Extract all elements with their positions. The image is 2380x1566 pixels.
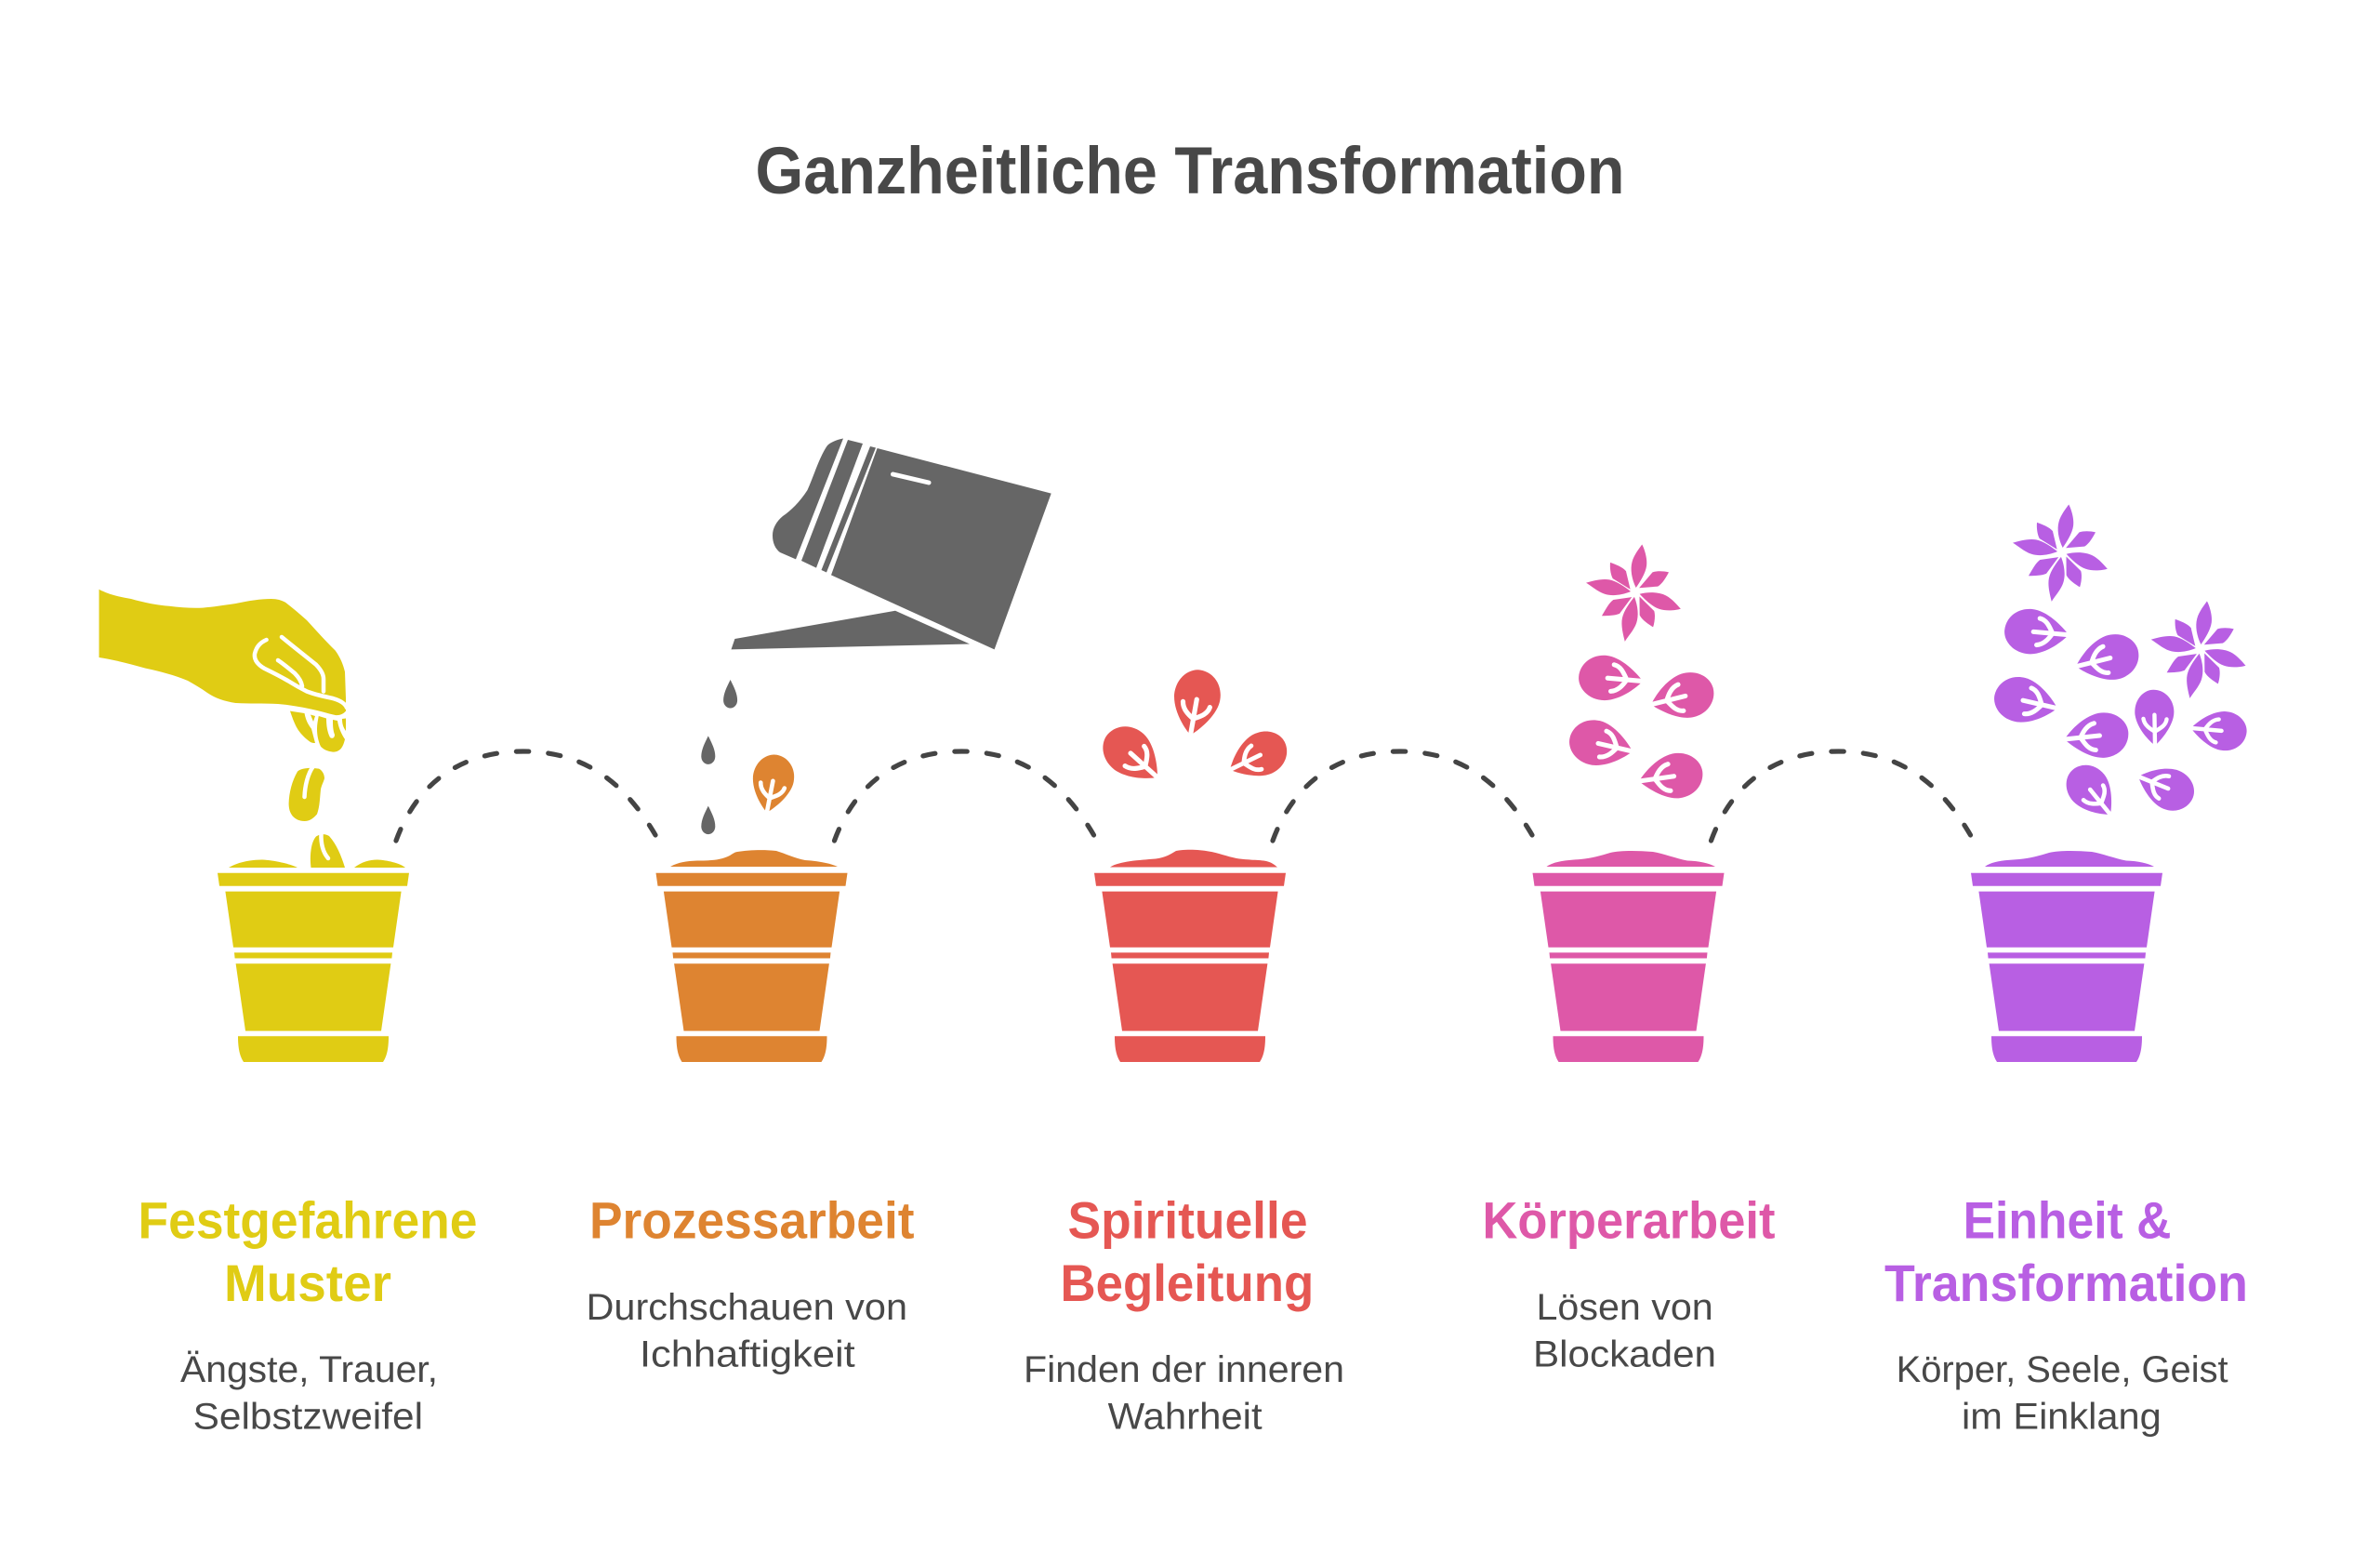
description: Durchschauen — [586, 1287, 907, 1374]
icon: watering can — [731, 439, 1051, 649]
stage 1: seeds in yellow pot — [99, 590, 409, 1062]
connector arrow 2 — [835, 751, 1093, 841]
label: Spirituelle Begleitung: Spirituelle — [1067, 1191, 1307, 1250]
label: Festgefahrene Muster — [138, 1191, 478, 1312]
pot: purple — [1971, 873, 2162, 1062]
pot: pink — [1532, 873, 1724, 1062]
soil: pink — [1547, 851, 1715, 867]
description: Finden: Finden der inneren — [1024, 1349, 1344, 1390]
label: Einheit & Transformation: Transformation — [1884, 1254, 2248, 1312]
description: Durchschauen: Ichhaftigkeit — [640, 1334, 855, 1374]
label: Einheit & Transformation: Einheit & — [1964, 1191, 2171, 1250]
label: Spirituelle Begleitung — [1060, 1191, 1314, 1312]
icon: flower — [1584, 543, 1684, 644]
title: Ganzheitliche Transformation — [755, 135, 1625, 208]
icon: water drops — [701, 680, 737, 834]
icon: seeds under the hand — [290, 711, 346, 752]
icon: leaf cluster — [1565, 653, 1719, 803]
description: Körper, Seele, Geist: im Einklang — [1962, 1397, 2162, 1438]
stage 3: red pot with leaves — [1093, 666, 1294, 1062]
label: Einheit & Transformation — [1884, 1191, 2248, 1312]
description: Lösen: Lösen von — [1536, 1287, 1713, 1328]
label: Festgefahrene Muster: Festgefahrene — [138, 1191, 478, 1250]
description: Körper, Seele, Geist — [1897, 1349, 2228, 1438]
connector arrow 4 — [1711, 751, 1971, 841]
icon: falling seed — [289, 766, 324, 821]
label: Festgefahrene Muster: Muster — [224, 1254, 391, 1312]
connector arrow 1 — [396, 751, 655, 841]
description: Finden — [1024, 1349, 1344, 1438]
soil: orange — [670, 850, 838, 867]
icon: leaf cluster — [1990, 607, 2248, 829]
pot: yellow — [218, 873, 409, 1062]
label: Prozessarbeit: Prozessarbeit — [589, 1191, 915, 1250]
description: Lösen — [1533, 1287, 1716, 1374]
connector arrow 3 — [1273, 751, 1532, 841]
stage 2: watering in orange pot — [701, 439, 1051, 834]
pot: orange — [656, 873, 848, 1062]
description: Lösen: Blockaden — [1533, 1334, 1716, 1374]
label: Spirituelle Begleitung: Begleitung — [1060, 1254, 1314, 1312]
soil: purple — [1985, 851, 2154, 867]
soil: red — [1110, 850, 1277, 867]
description: Körper, Seele, Geist: Körper, Seele, Geist — [1897, 1349, 2228, 1390]
icon: flowers — [2011, 503, 2248, 700]
stage 5: purple pot with leaves and flowers — [1971, 503, 2248, 1062]
description: Ängste: Selbstzweifel — [193, 1397, 423, 1438]
description: Ängste: Ängste, Trauer, — [180, 1349, 438, 1390]
pot: red — [1094, 873, 1286, 1062]
description: Finden: Wahrheit — [1108, 1397, 1263, 1438]
icon: hand — [99, 590, 347, 715]
icon: leaf cluster — [1093, 666, 1294, 797]
stage 4: pink pot with leaves and flower — [1532, 543, 1724, 1062]
soil mounds and seed in the pot — [229, 833, 405, 868]
label: Körperarbeit: Körperarbeit — [1482, 1191, 1776, 1250]
icon: sprout leaf — [746, 751, 798, 819]
description: Ängste — [180, 1349, 438, 1438]
description: Durchschauen: Durchschauen von — [586, 1287, 907, 1328]
